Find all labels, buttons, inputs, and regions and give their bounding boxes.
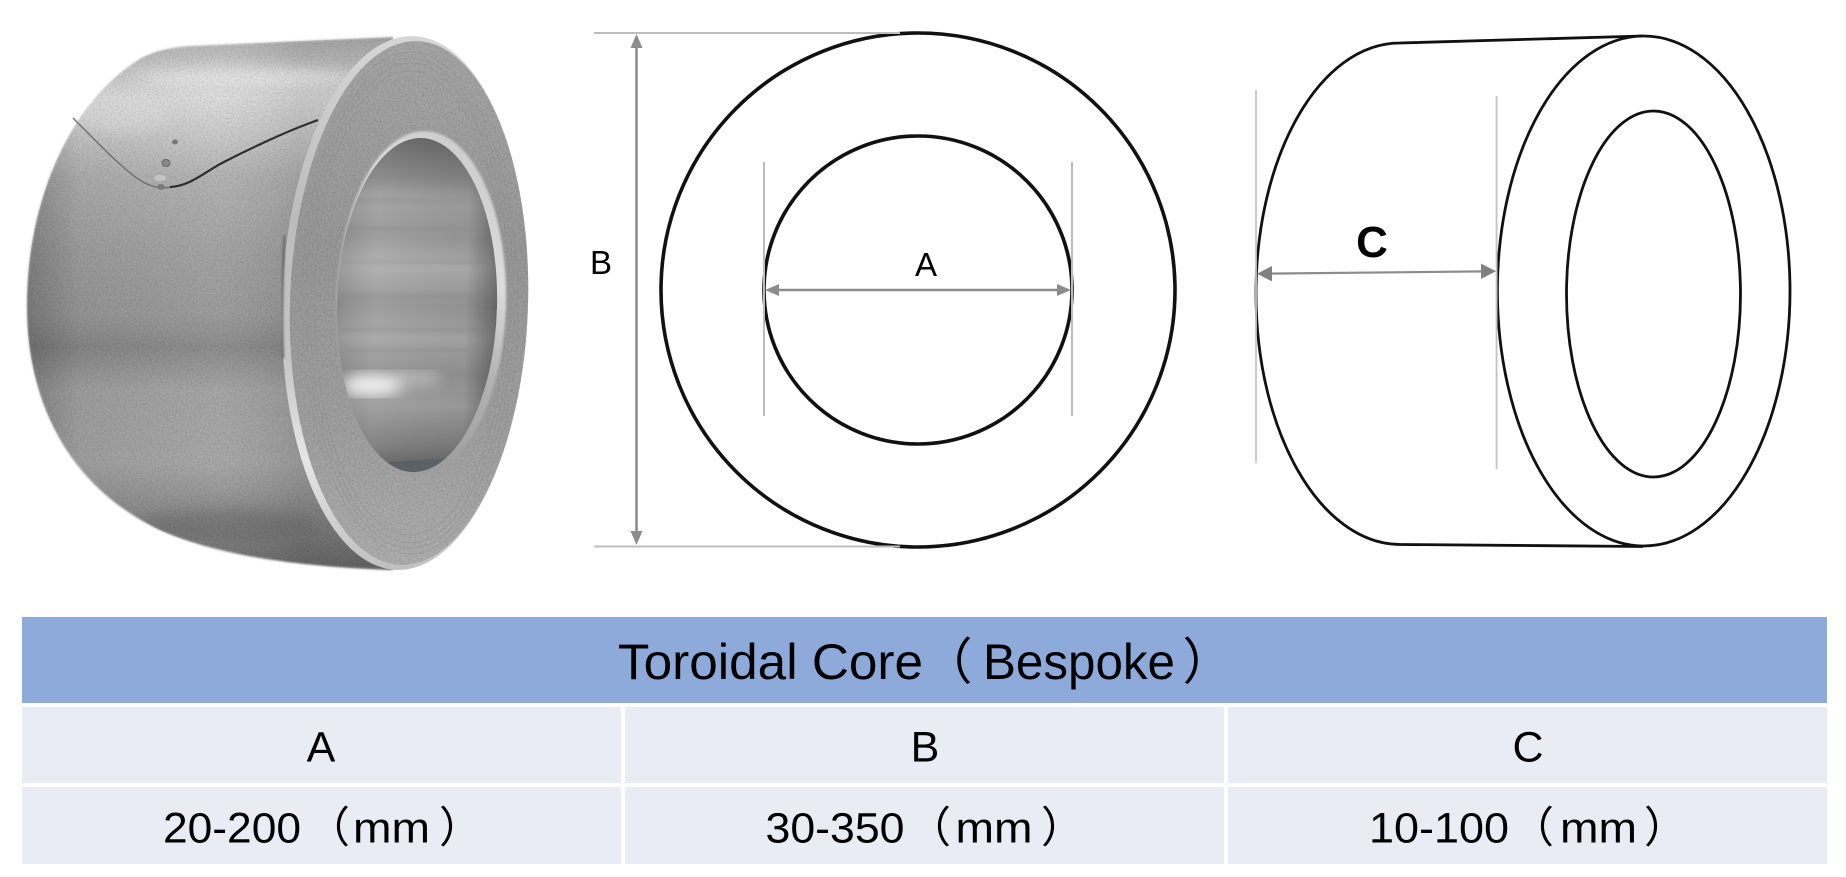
- cell: B: B: [911, 724, 939, 772]
- table header: ）: [1182, 634, 1232, 690]
- cell: A range: ）: [439, 804, 482, 852]
- cell: C: C: [1512, 724, 1544, 772]
- cell: B range: 30-350: [766, 804, 904, 852]
- arrow: dimension C: [1257, 264, 1496, 281]
- arrow: dimension B: [630, 34, 642, 545]
- cell: A range: [22, 787, 621, 864]
- outer circle: [661, 33, 1175, 547]
- label C: C: [1356, 218, 1388, 267]
- cell: C range: mm: [1560, 804, 1637, 852]
- cell: C range: ）: [1644, 804, 1687, 852]
- cell: B range: mm: [956, 804, 1032, 852]
- label B: B: [590, 244, 612, 281]
- cell: C: [1228, 707, 1827, 783]
- hole interior: [333, 136, 501, 480]
- table header: Bespoke: [983, 634, 1175, 690]
- cell: C range: 10-100: [1369, 804, 1509, 852]
- front inner ellipse: [1566, 111, 1740, 477]
- cell: C range: [1228, 787, 1827, 864]
- diagram: side view with dimension C: [1256, 36, 1790, 546]
- cell: A range: 20-200: [163, 804, 301, 852]
- diagram: front view with dimensions A and B: [590, 33, 1175, 547]
- cell: A: A: [307, 724, 336, 772]
- table header: [22, 617, 1827, 703]
- cell: C range: （: [1511, 804, 1554, 852]
- cylinder outer surface: [27, 37, 393, 570]
- rim dark seam: [282, 235, 285, 358]
- cylinder body outline: [1256, 36, 1643, 546]
- cell: A range: mm: [353, 804, 430, 852]
- photo: wound metal toroidal core: [27, 32, 536, 574]
- guide lines: [594, 33, 1072, 546]
- front rim: [274, 32, 536, 574]
- hole inner lip: [332, 129, 510, 477]
- ring end face: [282, 37, 536, 569]
- guide lines: [1256, 90, 1497, 469]
- arrow: dimension A: [765, 284, 1071, 296]
- label A: A: [915, 246, 937, 283]
- inner circle: [764, 136, 1072, 444]
- table header: （: [922, 634, 972, 690]
- table: toroidal core dimensions: [22, 617, 1827, 864]
- foil end flap line: [73, 118, 318, 188]
- table header: Toroidal Core: [618, 634, 923, 690]
- cell: B range: ）: [1041, 804, 1084, 852]
- front outer ellipse: [1497, 36, 1790, 546]
- cell: A: [22, 707, 621, 783]
- cell: B: [625, 707, 1224, 783]
- weld spots: [154, 140, 178, 190]
- cell: A range: （: [307, 804, 350, 852]
- cell: B range: [625, 787, 1224, 864]
- cell: B range: （: [908, 804, 951, 852]
